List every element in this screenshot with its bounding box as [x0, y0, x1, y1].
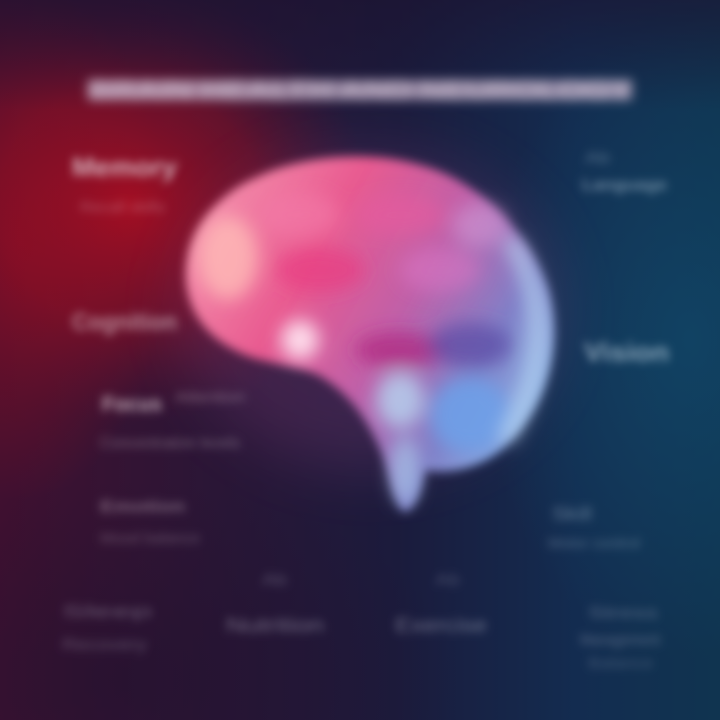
- brain illustration: [180, 150, 560, 512]
- label: top left: Recall skills: [80, 199, 165, 216]
- label: top right: Ab: [585, 150, 610, 167]
- label: lower left: Attention: [175, 389, 245, 406]
- label: top right: [582, 150, 667, 194]
- label: lower left: [100, 389, 245, 452]
- label: middle left: Cognition: [72, 309, 177, 336]
- bottom label 3: [395, 572, 487, 637]
- brain body: [186, 156, 554, 512]
- label: top left: Memory: [72, 152, 178, 182]
- bottom label 1: [62, 602, 152, 654]
- bottom label 4: Balance: [588, 655, 653, 672]
- label: lower right: Skill: [552, 504, 592, 524]
- label: lower left two: Emotion: [100, 497, 185, 516]
- bottom label 3: Exercise: [395, 615, 487, 637]
- bottom label 4: [580, 605, 660, 672]
- label: top right: Language: [582, 177, 667, 194]
- label: middle right: Vision: [584, 337, 669, 367]
- label: lower right: Motor control: [548, 535, 640, 552]
- title: BRAIN HEALTH AND NEUROLOGY: [88, 75, 632, 105]
- bottom label 2: Ab: [262, 572, 287, 589]
- brain glow: [180, 150, 560, 470]
- brain lobe highlights: [198, 193, 538, 504]
- label: top left: [72, 152, 178, 216]
- bottom label 3: Ab: [435, 572, 460, 589]
- bottom label 2: Nutrition: [226, 615, 324, 637]
- bottom label 2: [226, 572, 324, 637]
- bottom label 4: Management: [580, 632, 660, 649]
- label: lower left two: Mood balance: [100, 530, 200, 547]
- label: lower left: Concentration levels: [100, 435, 240, 452]
- bottom label 1: Sleep: [62, 602, 152, 621]
- label: lower right: [548, 504, 640, 552]
- label: lower left two: [100, 497, 200, 547]
- left labels: [72, 152, 245, 547]
- right labels: [548, 150, 669, 552]
- label: lower left: Focus: [102, 393, 162, 416]
- bottom label 1: Recovery: [62, 635, 148, 654]
- bottom label 4: Stress: [588, 605, 658, 622]
- bottom row labels: [62, 572, 660, 672]
